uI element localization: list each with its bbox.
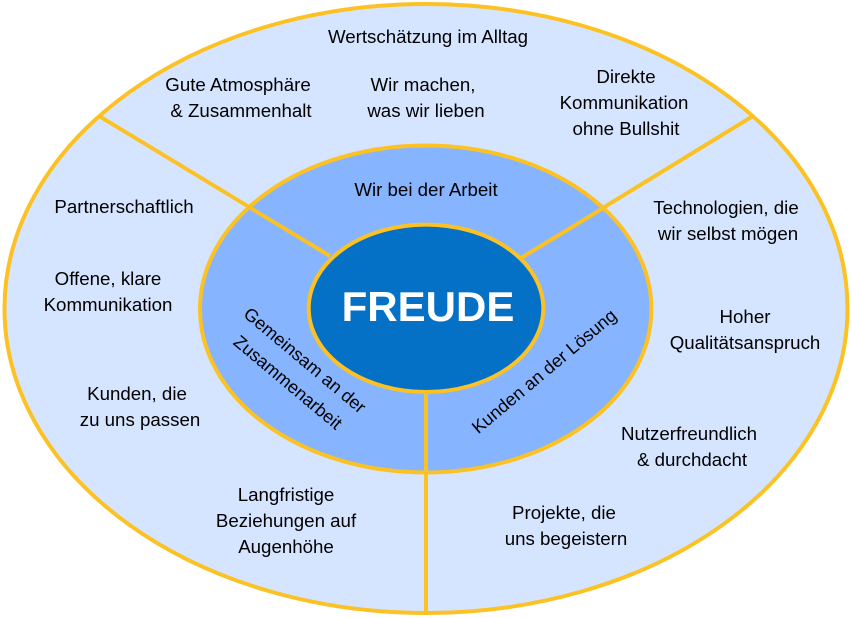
middle ring dividers [247,206,605,472]
text: Offene, klare Kommunikation: Offene, klare [55,268,161,289]
text: Gemeinsam an der Zusammenarbeit (rotated): Gemeinsam an der [240,304,370,417]
text: Technologien: wir selbst mögen [657,223,798,244]
text: Langfristige Beziehungen: Beziehungen auf [216,510,357,531]
text: Gute Atmosphäre: & Zusammenhalt [170,100,312,121]
text: Projekte, die uns begeistern: uns begeistern [505,528,627,549]
text: Wir machen: was wir lieben [366,100,485,121]
text: Direkte Kommunikation: ohne Bullshit [572,118,680,139]
text: Hoher Qualitätsanspruch: Qualitätsanspruch [670,332,820,353]
text: Langfristige Beziehungen: Langfristige [238,484,334,505]
heading: Wertschätzung im Alltag: Wertschätzung im Alltag [328,26,528,47]
text: Gemeinsam an der Zusammenarbeit (rotated): Zusammenarbeit [230,331,346,433]
text: Offene, klare Kommunikation: Kommunikation [44,294,172,315]
text: Direkte Kommunikation: Direkte [596,66,656,87]
text: Nutzerfreundlich: Nutzerfreundlich [621,423,757,444]
text: Nutzerfreundlich: & durchdacht [637,449,748,470]
text: Wir bei der Arbeit: Wir bei der Arbeit [354,179,498,200]
center ellipse: FREUDE: FREUDE [342,283,514,330]
text: Hoher Qualitätsanspruch: Hoher [720,306,770,327]
text: Wir machen: Wir machen, [371,74,475,95]
text: Kunden, die zu uns passen: zu uns passen [80,409,200,430]
text: Kunden, die zu uns passen: Kunden, die [87,383,187,404]
spoke dividers [99,116,753,613]
text: Direkte Kommunikation: Kommunikation [560,92,688,113]
text: Technologien: Technologien, die [653,197,799,218]
text: Partnerschaftlich: Partnerschaftlich [54,196,194,217]
center ellipse: FREUDE [309,225,543,392]
text: Kunden an der Lösung (rotated): Kunden an der Lösung [468,305,620,438]
text: Gute Atmosphäre: Gute Atmosphäre [165,74,311,95]
text: Projekte, die uns begeistern: Projekte, die [512,502,616,523]
middle ellipse [200,146,651,472]
text: Langfristige Beziehungen: Augenhöhe [238,536,334,557]
